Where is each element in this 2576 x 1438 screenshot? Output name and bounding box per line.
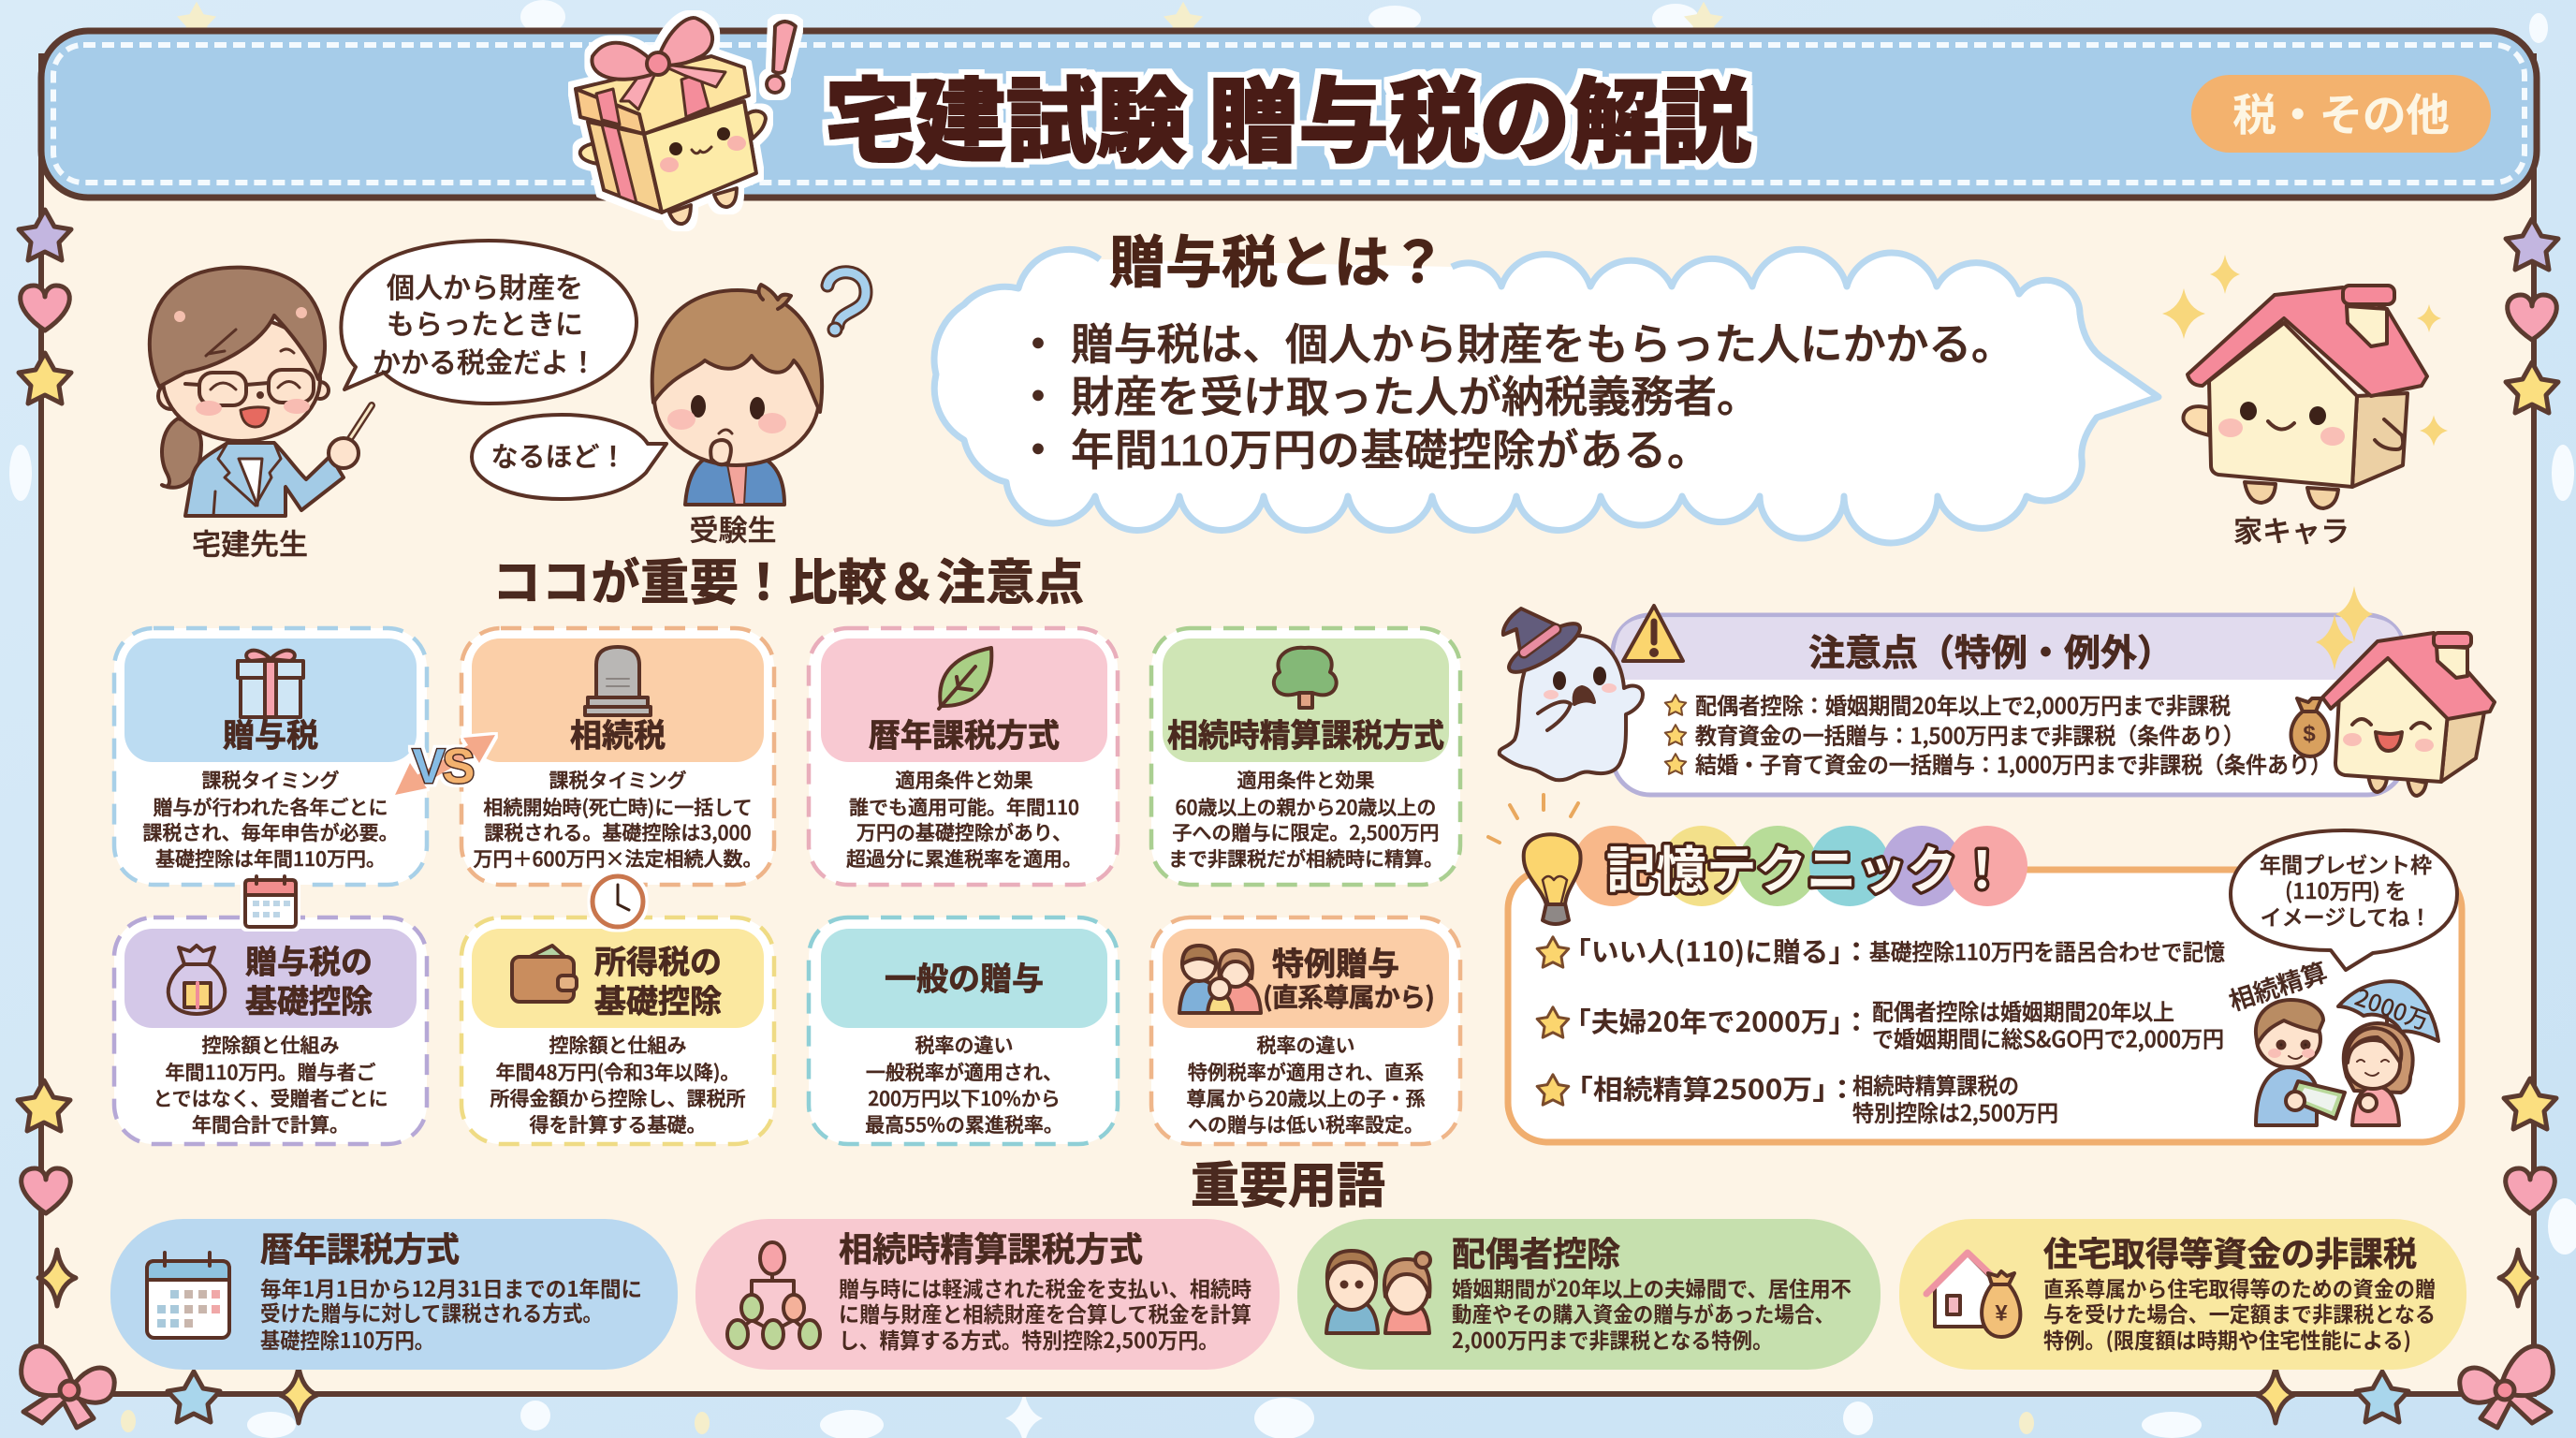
speech bubble: teacher: もらったときに	[387, 301, 583, 343]
list: memory tricks: で婚姻期間に総S&GO円で2,000万円	[1872, 1020, 2224, 1054]
panel: 贈与税の基礎控除: 贈与税の	[245, 936, 373, 983]
panel: 所得税の基礎控除: 所得税の	[594, 936, 722, 983]
term pill: 配偶者控除: 動産やその購入資金の贈与があった場合、	[1452, 1297, 1835, 1328]
panel: 特例贈与: 税率の違い	[1256, 1031, 1355, 1059]
panel: 特例贈与: (直系尊属から)	[1263, 977, 1435, 1015]
panel: 一般の贈与: 200万円以下10%から	[868, 1084, 1061, 1112]
panel: 所得税の基礎控除: 所得金額から控除し、課税所	[490, 1084, 745, 1112]
panel: 贈与税の基礎控除	[114, 917, 427, 1144]
icon: family tree	[727, 1242, 820, 1348]
panel: 贈与税: 贈与税	[223, 710, 318, 756]
panel: 贈与税: 基礎控除は年間110万円。	[155, 844, 386, 873]
term pill: 配偶者控除: 2,000万円まで非課税となる特例。	[1452, 1323, 1773, 1355]
panel: 贈与税: 課税され、毎年申告が必要。	[142, 818, 399, 846]
character: student	[652, 285, 822, 505]
character: house	[2162, 255, 2448, 508]
panel: 贈与税の基礎控除: とではなく、受贈者ごとに	[153, 1084, 388, 1112]
term pill: 配偶者控除: 配偶者控除	[1452, 1227, 1620, 1276]
speech bubble: teacher: 個人から財産を	[387, 265, 583, 306]
panel: 注意点: 注意点（特例・例外）	[1808, 624, 2174, 677]
panel: 相続時精算課税方式	[1151, 628, 1460, 885]
character: ghost	[1500, 609, 1643, 780]
panel: 相続税: 課税タイミング	[549, 766, 687, 794]
panel: 贈与税の基礎控除: 年間合計で計算。	[192, 1110, 349, 1138]
list: memory tricks: 「いい人(110)に贈る」：	[1563, 931, 1870, 970]
list: 注意点 items	[1665, 687, 2332, 779]
title: 宅建試験 贈与税の解説	[825, 48, 1751, 181]
panel: 贈与税の基礎控除: 控除額と仕組み	[202, 1031, 339, 1059]
panel: 贈与税: 贈与が行われた各年ごとに	[154, 793, 388, 821]
panel: 所得税の基礎控除: 年間48万円(令和3年以降)。	[496, 1058, 739, 1086]
illustration: couple with umbrella: 2000万	[2350, 979, 2435, 1037]
panel: 相続時精算課税方式: 適用条件と効果	[1237, 766, 1374, 794]
icon: calendar	[147, 1253, 229, 1338]
illustration: couple with umbrella	[2256, 979, 2438, 1125]
list: 注意点 items: 結婚・子育て資金の一括贈与：1,000万円まで非課税（条件あり）	[1695, 747, 2332, 779]
speech bubble: 年間プレゼント枠: (110万円) を	[2285, 873, 2407, 905]
text: definition bullets	[1017, 320, 2014, 475]
icon: leaf	[939, 648, 991, 709]
panel: 一般の贈与: 一般税率が適用され、	[866, 1058, 1062, 1086]
heading: ココが重要: ココが重要！比較＆注意点	[492, 543, 1084, 614]
panel: 贈与税: 課税タイミング	[202, 766, 339, 794]
icon: money bag	[168, 946, 225, 1014]
text: definition bullets: 財産を受け取った人が納税義務者。	[1071, 373, 1760, 421]
panel: 一般の贈与	[809, 917, 1118, 1144]
panel: 特例贈与: 特例贈与	[1272, 938, 1399, 985]
panel: 相続税: 万円＋600万円×法定相続人数。	[474, 844, 762, 873]
speech bubble: student	[472, 415, 666, 499]
cloud callout: 贈与税とは	[934, 217, 2159, 543]
term pill: 住宅取得等資金の非課税: 直系尊属から住宅取得等のための資金の贈	[2043, 1271, 2436, 1303]
term pill: 相続時精算課税方式: に贈与財産と相続財産を合算して税金を計算	[839, 1297, 1251, 1328]
term pill: 住宅取得等資金の非課税: 与を受けた場合、一定額まで非課税となる	[2043, 1297, 2436, 1328]
term pill: 相続時精算課税方式	[695, 1219, 1280, 1370]
icon: calendar	[245, 876, 296, 927]
term pill: 相続時精算課税方式: 贈与時には軽減された税金を支払い、相続時	[839, 1271, 1251, 1303]
panel: 暦年課税方式: 暦年課税方式	[869, 710, 1060, 756]
panel: 相続税	[461, 628, 774, 885]
icon: tree	[1274, 648, 1337, 708]
panel: 贈与税の基礎控除: 年間110万円。贈与者ご	[166, 1058, 375, 1086]
speech bubble: student: なるほど！	[490, 435, 627, 475]
panel: 特例贈与: 尊属から20歳以上の子・孫	[1187, 1084, 1425, 1112]
label: 受験生: 受験生	[689, 507, 777, 549]
panel: 暦年課税方式	[809, 628, 1118, 885]
icon: VS arrow: V	[413, 740, 446, 794]
term pill: 住宅取得等資金の非課税: 特例。(限度額は時期や住宅性能による)	[2043, 1323, 2411, 1355]
heading: 重要用語: 重要用語	[1191, 1146, 1385, 1217]
panel: 記憶テクニック	[1508, 826, 2462, 1142]
panel: 所得税の基礎控除: 基礎控除	[594, 976, 722, 1022]
icon: VS arrow: S	[443, 740, 475, 794]
icon: couple	[1326, 1251, 1430, 1333]
term pill: 相続時精算課税方式: し、精算する方式。特別控除2,500万円。	[839, 1323, 1219, 1355]
icon: gravestone	[585, 647, 651, 715]
text: definition bullets: ・	[1017, 426, 1060, 475]
panel: 相続時精算課税方式: 60歳以上の親から20歳以上の	[1176, 793, 1436, 821]
term pill: 相続時精算課税方式: 相続時精算課税方式	[839, 1223, 1143, 1271]
panel: 贈与税	[114, 628, 427, 885]
icon: family	[1179, 946, 1261, 1013]
heading: 贈与税とは？: 贈与税とは？	[1109, 217, 1446, 300]
badge: 税・その他: 税・その他	[2232, 79, 2450, 144]
character: house with money bag	[2291, 586, 2495, 796]
label: 家キャラ: 家キャラ	[2233, 507, 2349, 550]
term pill: 暦年課税方式	[110, 1219, 678, 1370]
badge: 税・その他	[2191, 75, 2491, 153]
label: 宅建先生: 宅建先生	[192, 521, 308, 564]
term pill: 暦年課税方式: 基礎控除110万円。	[260, 1323, 434, 1355]
icon: light bulb	[1488, 795, 1581, 924]
list: memory tricks: 特別控除は2,500万円	[1852, 1095, 2058, 1127]
list: 注意点 items: 教育資金の一括贈与：1,500万円まで非課税（条件あり）	[1695, 717, 2245, 751]
speech bubble: 年間プレゼント枠: イメージしてね！	[2261, 900, 2431, 932]
term pill: 住宅取得等資金の非課税: 住宅取得等資金の非課税	[2043, 1227, 2417, 1276]
heading: 記憶テクニック: 記憶テクニック！	[1606, 829, 2007, 902]
label: 相続精算: 相続精算	[2224, 952, 2331, 1018]
panel: 所得税の基礎控除: 得を計算する基礎。	[530, 1110, 706, 1138]
text: definition bullets: ・	[1017, 320, 1060, 369]
panel: 注意点	[1613, 615, 2405, 795]
character: teacher	[150, 268, 372, 516]
list: memory tricks: 相続時精算課税の	[1852, 1067, 2019, 1101]
term pill: 配偶者控除: 婚姻期間が20年以上の夫婦間で、居住用不	[1452, 1271, 1852, 1303]
panel: 所得税の基礎控除: 控除額と仕組み	[549, 1031, 687, 1059]
panel: 特例贈与	[1151, 917, 1460, 1144]
panel: 贈与税の基礎控除: 基礎控除	[245, 976, 373, 1022]
panel: 相続税: 相続税	[570, 710, 666, 756]
icon: VS arrow	[395, 735, 495, 795]
list: memory tricks: 配偶者控除は婚姻期間20年以上	[1872, 994, 2174, 1026]
panel: 暦年課税方式: 適用条件と効果	[895, 766, 1033, 794]
panel: 暦年課税方式: 万円の基礎控除があり、	[856, 818, 1072, 846]
text: definition bullets: 年間110万円の基礎控除がある。	[1071, 426, 1710, 475]
text: definition bullets: ・	[1017, 373, 1060, 421]
speech bubble: 年間プレゼント枠	[2231, 830, 2457, 970]
list: memory tricks: 基礎控除110万円を語呂合わせで記憶	[1869, 934, 2225, 966]
list: memory tricks: 「夫婦20年で2000万」：	[1563, 1001, 1870, 1040]
list: 注意点 items: 配偶者控除：婚姻期間20年以上で2,000万円まで非課税	[1695, 687, 2231, 721]
term pill: 暦年課税方式: 受けた贈与に対して課税される方式。	[260, 1296, 603, 1328]
panel: 相続時精算課税方式: 子への贈与に限定。2,500万円	[1172, 818, 1440, 846]
panel: 相続税: 相続開始時(死亡時)に一括して	[483, 793, 753, 821]
icon: question mark	[827, 272, 866, 336]
term pill: 配偶者控除	[1297, 1219, 1881, 1370]
panel: 特例贈与: 特例税率が適用され、直系	[1188, 1058, 1424, 1086]
panel: 暦年課税方式: 誰でも適用可能。年間110	[849, 793, 1079, 821]
panel: 相続税: 課税される。基礎控除は3,000	[484, 818, 752, 846]
list: memory tricks: 「相続精算2500万」：	[1563, 1068, 1857, 1108]
icon: gift	[238, 651, 303, 717]
panel: 特例贈与: への贈与は低い税率設定。	[1188, 1110, 1424, 1138]
panel: 一般の贈与: 一般の贈与	[885, 953, 1044, 1000]
panel: 相続時精算課税方式: まで非課税だが相続時に精算。	[1168, 844, 1443, 873]
header band	[41, 31, 2537, 198]
panel: 一般の贈与: 税率の違い	[915, 1031, 1013, 1059]
speech bubble: 年間プレゼント枠: 年間プレゼント枠	[2260, 847, 2432, 879]
panel: 相続時精算課税方式: 相続時精算課税方式	[1167, 710, 1444, 756]
icon: house and yen bag: ¥	[1995, 1301, 2008, 1326]
text: definition bullets: 贈与税は、個人から財産をもらった人にかかる。	[1071, 320, 2014, 369]
term pill: 暦年課税方式: 暦年課税方式	[260, 1223, 460, 1271]
speech bubble: teacher: かかる税金だよ！	[373, 340, 597, 381]
icon: wallet	[512, 946, 577, 1002]
character: house with money bag: $	[2303, 721, 2316, 747]
panel: 一般の贈与: 最高55%の累進税率。	[865, 1110, 1063, 1138]
panel: 暦年課税方式: 超過分に累進税率を適用。	[846, 844, 1082, 873]
icon: house and yen bag	[1926, 1253, 2020, 1337]
list: memory tricks	[1537, 931, 2225, 1127]
term pill: 暦年課税方式: 毎年1月1日から12月31日までの1年間に	[260, 1271, 642, 1303]
term pill: 住宅取得等資金の非課税	[1899, 1219, 2466, 1370]
panel: 所得税の基礎控除	[461, 917, 774, 1144]
speech bubble: teacher	[341, 241, 637, 404]
icon: warning triangle	[1623, 606, 1683, 661]
icon: gift character	[576, 18, 796, 224]
icon: clock	[593, 876, 643, 927]
